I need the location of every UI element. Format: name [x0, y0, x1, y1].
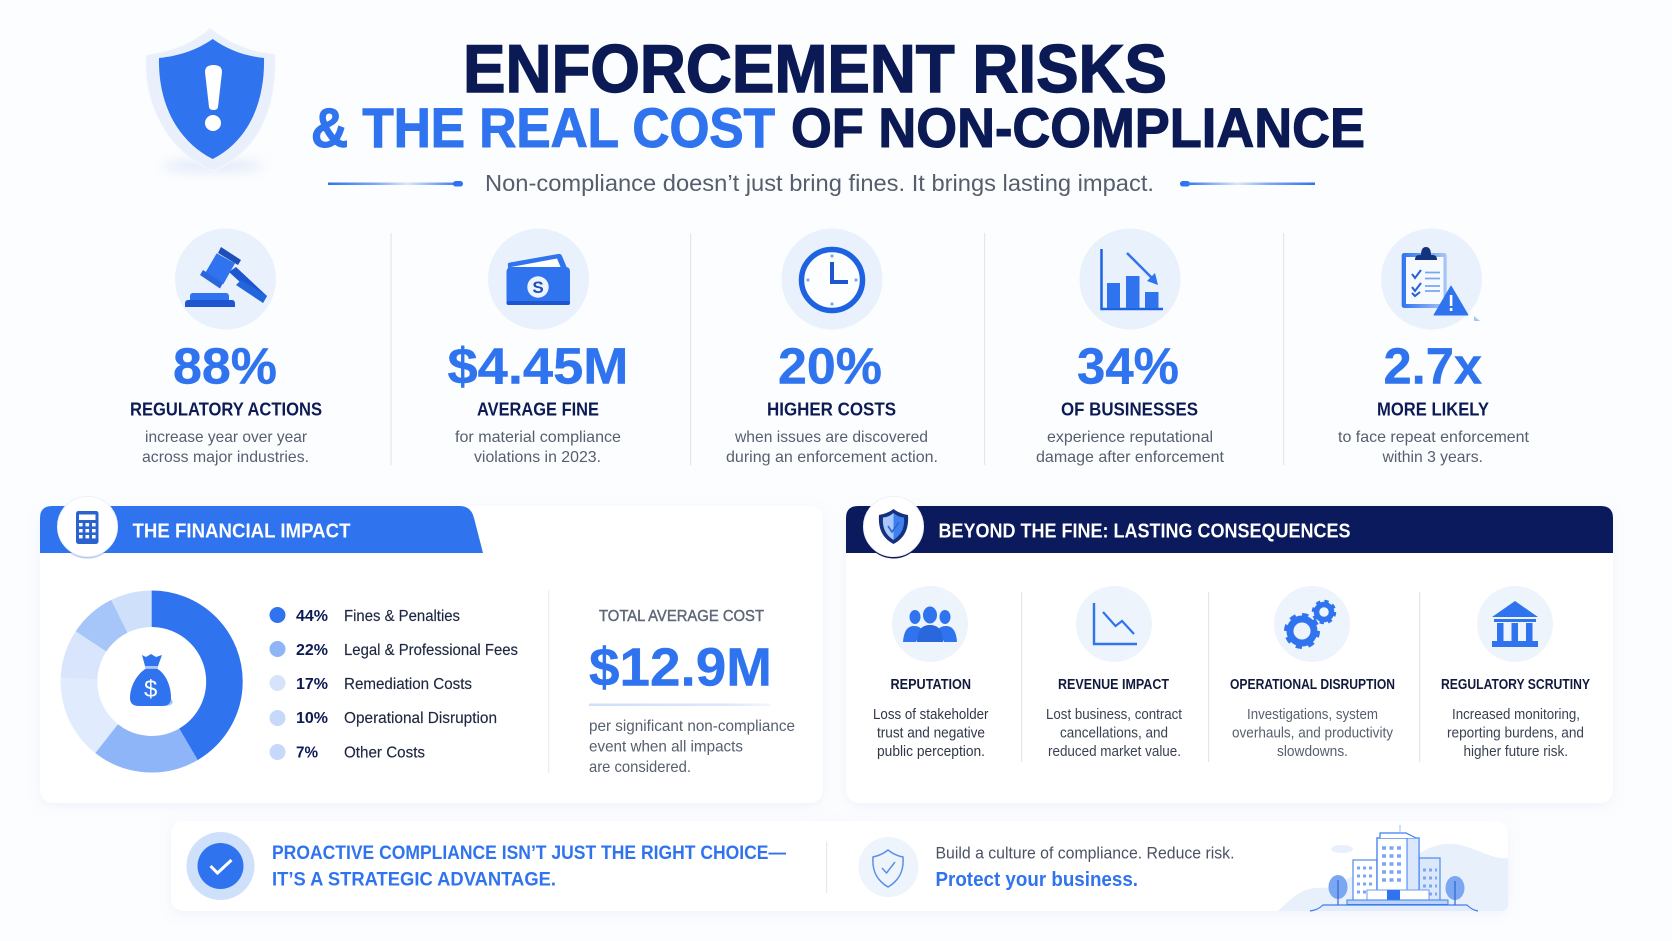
description: trust and negative: [877, 726, 985, 742]
title: & THE REAL COST: [311, 96, 775, 159]
description: reduced market value.: [1048, 744, 1181, 760]
description: [455, 429, 621, 466]
description: [873, 707, 989, 760]
panel: beyond the fine: [846, 496, 1613, 803]
stat: more likely: [1338, 228, 1530, 466]
value: 34%: [1077, 338, 1179, 394]
description: [142, 429, 309, 466]
icon: gears: [1274, 586, 1350, 662]
subtitle with decorative lines: [328, 170, 1315, 196]
description: during an enforcement action.: [726, 449, 938, 466]
icon: header shield: [879, 509, 908, 544]
total average cost: per significant non-compliance: [589, 718, 795, 735]
description: across major industries.: [142, 449, 309, 466]
description: to face repeat enforcement: [1338, 429, 1530, 446]
legend item: other: Other Costs: [344, 744, 425, 762]
donut chart: [49, 579, 254, 784]
description: for material compliance: [455, 429, 621, 446]
consequence: regulatory scrutiny: [1441, 586, 1590, 760]
value: 20%: [778, 338, 882, 394]
legend item: legal: [270, 641, 518, 659]
consequence: revenue impact: [1046, 586, 1182, 760]
icon: institution: [1477, 586, 1553, 662]
value: 2.7x: [1384, 338, 1482, 394]
panel header: BEYOND THE FINE: LASTING CONSEQUENCES: [938, 520, 1350, 542]
description: violations in 2023.: [474, 449, 601, 466]
description: Lost business, contract: [1046, 707, 1182, 723]
description: Loss of stakeholder: [873, 707, 989, 723]
heading: REGULATORY SCRUTINY: [1441, 677, 1590, 693]
total average cost: are considered.: [589, 759, 691, 776]
icon: clipboard with warning: [1381, 228, 1482, 330]
description: cancellations, and: [1060, 726, 1168, 742]
callout: proactive compliance banner: [171, 821, 1508, 911]
legend item: fines: 44%: [296, 608, 328, 625]
icon: warning shield: [146, 28, 275, 171]
callout headline: PROACTIVE COMPLIANCE ISN’T JUST THE RIGHT CHOICE—: [272, 842, 786, 864]
icon: money bag: [130, 654, 173, 706]
callout headline: [272, 842, 786, 890]
description: increase year over year: [145, 429, 308, 446]
illustration: office building: [1278, 825, 1508, 911]
stat: higher costs: [726, 228, 938, 466]
panel header: [40, 496, 483, 558]
legend item: remediation: [270, 675, 472, 693]
stat: of businesses: [1036, 228, 1225, 466]
callout text: [936, 844, 1234, 891]
description: [1338, 429, 1530, 466]
legend item: operational: [270, 710, 497, 727]
description: [1036, 429, 1225, 466]
description: [1046, 707, 1182, 760]
description: [1447, 707, 1584, 760]
description: Increased monitoring,: [1452, 707, 1580, 723]
icon: falling line chart: [1076, 586, 1152, 662]
title: OF NON-COMPLIANCE: [791, 96, 1365, 159]
heading: REPUTATION: [890, 677, 971, 693]
icon: declining bar chart: [1080, 228, 1180, 330]
description: experience reputational: [1047, 429, 1213, 446]
heading: REVENUE IMPACT: [1058, 677, 1169, 693]
panel header: THE FINANCIAL IMPACT: [132, 520, 350, 542]
total average cost: [589, 608, 795, 776]
description: Investigations, system: [1247, 707, 1378, 723]
panel: the financial impact: [40, 496, 823, 803]
label: REGULATORY ACTIONS: [130, 400, 322, 420]
icon: banknotes: S: [532, 278, 544, 297]
label: MORE LIKELY: [1377, 400, 1489, 420]
consequence: reputation: [873, 586, 989, 760]
legend item: fines: Fines & Penalties: [344, 608, 460, 625]
description: damage after enforcement: [1036, 449, 1225, 466]
icon: gavel: [175, 228, 276, 330]
label: HIGHER COSTS: [767, 400, 896, 420]
title: ENFORCEMENT RISKS: [463, 31, 1167, 107]
legend item: operational: Operational Disruption: [344, 710, 497, 727]
legend item: operational: 10%: [296, 710, 328, 727]
legend item: other: 7%: [296, 744, 318, 762]
icon: check badge: [186, 832, 254, 900]
description: reporting burdens, and: [1447, 726, 1584, 742]
description: overhauls, and productivity: [1232, 726, 1394, 742]
label: AVERAGE FINE: [477, 400, 599, 420]
icon: banknotes: [488, 228, 589, 330]
description: slowdowns.: [1277, 744, 1348, 760]
callout text: Build a culture of compliance. Reduce risk.: [936, 844, 1234, 862]
description: within 3 years.: [1382, 449, 1483, 466]
icon: outlined shield: [858, 837, 918, 897]
icon: calculator: [76, 511, 98, 544]
panel header: [846, 496, 1613, 558]
total average cost: $12.9M: [589, 638, 772, 698]
description: higher future risk.: [1464, 744, 1568, 760]
title: [311, 31, 1365, 159]
stat: regulatory actions: [130, 228, 322, 466]
legend item: other: [270, 744, 425, 762]
legend: [270, 607, 518, 762]
stat: average fine: [448, 228, 628, 466]
legend item: remediation: 17%: [296, 676, 328, 693]
subtitle with decorative lines: Non-compliance doesn’t just bring fines. It brings lasting impact.: [485, 170, 1154, 196]
callout text: Protect your business.: [936, 869, 1138, 891]
legend item: legal: Legal & Professional Fees: [344, 642, 518, 659]
total average cost: TOTAL AVERAGE COST: [599, 608, 764, 625]
label: OF BUSINESSES: [1061, 400, 1198, 420]
description: public perception.: [877, 744, 985, 760]
icon: money bag: $: [144, 676, 157, 703]
icon: clock: [782, 228, 882, 330]
legend item: remediation: Remediation Costs: [344, 676, 472, 693]
heading: OPERATIONAL DISRUPTION: [1230, 677, 1395, 693]
description: [726, 429, 938, 466]
description: when issues are discovered: [734, 429, 928, 446]
value: $4.45M: [448, 338, 628, 394]
callout headline: IT’S A STRATEGIC ADVANTAGE.: [272, 868, 556, 890]
description: [1232, 707, 1394, 760]
legend item: fines: [270, 607, 460, 625]
total average cost: event when all impacts: [589, 738, 743, 756]
legend item: legal: 22%: [296, 642, 328, 659]
consequence: operational disruption: [1230, 586, 1395, 760]
icon: people: [892, 586, 968, 662]
value: 88%: [173, 338, 277, 394]
